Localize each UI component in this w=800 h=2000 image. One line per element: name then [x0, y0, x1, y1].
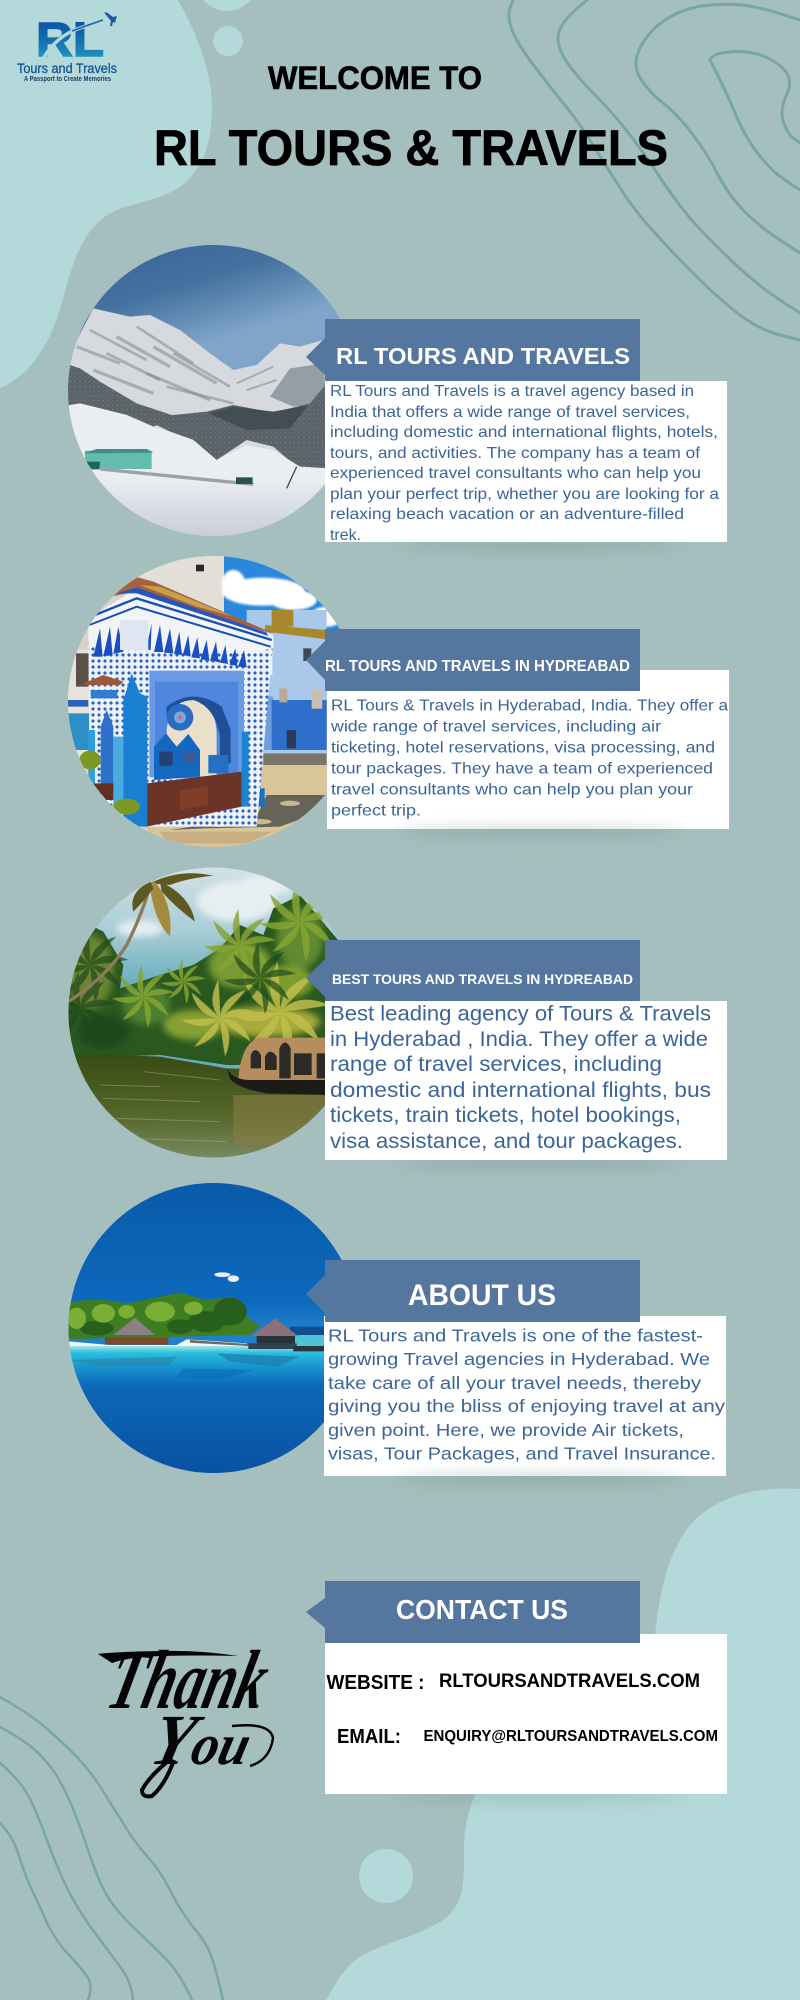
text panel: relaxing beach vacation or an adventure-filled [330, 506, 684, 523]
shadow [395, 1159, 685, 1167]
leaning palm [60, 883, 151, 1007]
ground [147, 753, 327, 850]
decorative circle: small top [213, 26, 243, 56]
left side [68, 650, 89, 756]
heading banner: RL TOURS AND TRAVELS [336, 343, 630, 369]
text panel [325, 381, 727, 544]
contact panel: EMAIL: [337, 1726, 401, 1748]
brick bench [147, 772, 242, 827]
thank you script: Thank [99, 1634, 278, 1726]
thank you script [98, 1634, 278, 1796]
text panel: including domestic and international flights, hotels, [330, 424, 718, 441]
title: RL Tours & Travels: RL TOURS & TRAVELS [154, 120, 668, 176]
contact panel [325, 1634, 727, 1794]
main building [88, 633, 273, 827]
text panel [325, 1001, 727, 1160]
text panel: experienced travel consultants who can help you [330, 465, 701, 482]
section: RL Tours and Travels [60, 240, 727, 549]
text panel: ticketing, hotel reservations, visa processing, and [331, 740, 715, 756]
text panel: wide range of travel services, including air [330, 718, 662, 736]
text panel: given point. Here, we provide Air tickets, [328, 1420, 684, 1440]
contact panel: WEBSITE : [326, 1672, 424, 1694]
huts [113, 1318, 155, 1335]
text panel: tours, and activities. The company has a team of [330, 445, 701, 462]
contact panel: RLTOURSANDTRAVELS.COM [439, 1670, 700, 1692]
text panel [324, 1316, 726, 1476]
text panel: plan your perfect trip, whether you are looking for a [330, 486, 719, 503]
text panel: RL Tours & Travels in Hyderabad, India. They offer a [331, 698, 728, 714]
shadow [395, 828, 685, 836]
houseboat [238, 1038, 325, 1080]
photo: snowy mountains [68, 245, 340, 536]
text panel: RL Tours and Travels is one of the fastest- [328, 1326, 703, 1346]
doorway [149, 671, 244, 777]
section: RL Tours and Travels in Hyderabad [60, 550, 729, 850]
contour lines: top right [509, 0, 800, 340]
heading banner: RL TOURS AND TRAVELS IN HYDREABAD [325, 658, 630, 675]
text panel: in Hyderabad , India. They offer a wide [330, 1028, 708, 1051]
text panel: travel consultants who can help you plan your [331, 782, 694, 798]
section: About us [60, 1180, 726, 1483]
shadow [395, 1793, 685, 1801]
decorative blob: top left [0, 0, 212, 388]
photo: blue courtyard building [68, 556, 340, 847]
columns [123, 673, 147, 827]
title: welcome to: WELCOME TO [268, 60, 482, 96]
decorative circle: top [196, 0, 258, 11]
island trees [60, 1293, 260, 1339]
text panel: visa assistance, and tour packages. [330, 1130, 683, 1153]
thank you script: You [144, 1701, 261, 1780]
text panel: range of travel services, including [330, 1053, 662, 1076]
right-hand house [247, 610, 327, 753]
heading banner [306, 1581, 640, 1643]
heading banner [306, 1260, 640, 1322]
heading banner: CONTACT US [396, 1594, 568, 1625]
text panel: domestic and international flights, bus [330, 1079, 711, 1102]
heading banner [306, 940, 640, 1001]
text panel: Best leading agency of Tours & Travels [330, 1002, 711, 1026]
heading banner [306, 629, 640, 691]
photo: backwaters houseboat [43, 865, 360, 1165]
text panel: perfect trip. [331, 802, 421, 820]
text panel [327, 670, 729, 829]
text panel: take care of all your travel needs, thereby [328, 1373, 701, 1393]
logo: RL Tours and Travels: Tours and Travels [17, 61, 117, 76]
section: Contact us [306, 1581, 727, 1801]
jungle mass [68, 896, 338, 1068]
contact panel: ENQUIRY@RLTOURSANDTRAVELS.COM [424, 1728, 718, 1745]
decorative circle: bottom [359, 1849, 413, 1903]
section: Best Tours and Travels in Hyderabad [43, 865, 727, 1167]
text panel: growing Travel agencies in Hyderabad. We [328, 1349, 710, 1369]
shadow [395, 1475, 685, 1483]
logo: RL Tours and Travels: A Passport to Create Memories [24, 76, 111, 83]
text panel: India that offers a wide range of travel services, [330, 404, 690, 421]
heading banner: ABOUT US [408, 1279, 556, 1312]
contour lines: bottom left [0, 1697, 223, 2000]
heading banner [306, 319, 640, 381]
text panel: visas, Tour Packages, and Travel Insurance. [328, 1444, 716, 1464]
text panel: tickets, train tickets, hotel bookings, [330, 1104, 681, 1127]
logo: RL Tours and Travels: RL [36, 14, 104, 67]
decorative blob: bottom right [326, 1488, 800, 2000]
text panel: tour packages. They have a team of experienced [331, 760, 713, 778]
heading banner: BEST TOURS AND TRAVELS IN HYDREABAD [332, 971, 633, 987]
water [74, 1055, 325, 1158]
shadow [395, 541, 685, 549]
photo: island resort [68, 1183, 342, 1473]
text panel: giving you the bliss of enjoying travel at any [328, 1396, 725, 1416]
logo: RL Tours and Travels [17, 12, 117, 83]
text panel: RL Tours and Travels is a travel agency based in [330, 383, 694, 400]
text panel: trek. [330, 527, 361, 544]
